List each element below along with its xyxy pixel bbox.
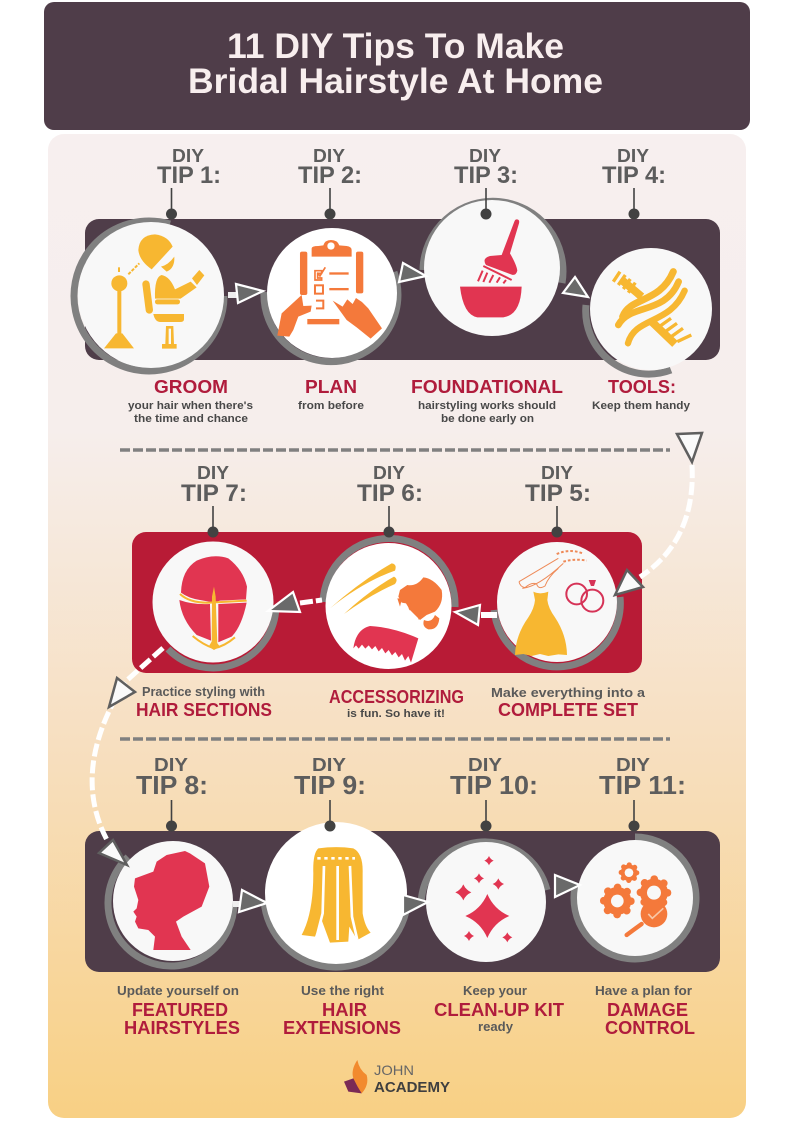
logo: John Academy <box>344 1060 450 1096</box>
circle: tip 10 clean-up kit <box>421 842 547 962</box>
caption: featured hairstyles: FEATURED <box>132 1000 228 1020</box>
band: row 3 <box>85 831 720 972</box>
caption: foundational <box>411 377 563 425</box>
tip 3 label: TIP 3: <box>454 162 518 189</box>
tip 5 label <box>525 463 591 538</box>
arrow: tip 2 to 3 <box>399 263 426 282</box>
tip 4 label <box>602 146 666 220</box>
icon: salon hair dryer chair <box>104 234 204 349</box>
caption: complete set: Make everything into a <box>491 685 646 700</box>
caption: clean-up kit: Keep your <box>463 983 527 998</box>
caption: hair extensions: HAIR <box>322 1000 367 1020</box>
tip 6 label <box>357 463 423 538</box>
caption: groom <box>128 377 253 425</box>
caption: damage control: Have a plan for <box>595 983 692 998</box>
tip 3 label: DIY <box>469 146 501 166</box>
caption: complete set: COMPLETE SET <box>498 700 638 720</box>
tip 8 label: TIP 8: <box>136 770 208 800</box>
caption: hair sections: HAIR SECTIONS <box>136 700 272 720</box>
arrow: tip 10 to 11 <box>555 875 580 897</box>
tip 9 label <box>294 755 366 832</box>
caption: featured hairstyles: Update yourself on <box>117 983 239 998</box>
tip 2 label: TIP 2: <box>298 162 362 189</box>
icon: flowers and mirror <box>603 864 668 935</box>
tip 11 label: TIP 11: <box>599 770 686 800</box>
tip 11 label <box>599 755 686 832</box>
arrow: tip 5 to 6 <box>455 605 497 625</box>
caption: tools: Keep them handy <box>592 400 691 412</box>
tip 8 label: DIY <box>154 755 188 775</box>
caption: groom: the time and chance <box>134 413 248 425</box>
circle: tip 6 accessorizing <box>323 538 455 669</box>
tip 1 label: TIP 1: <box>157 162 221 189</box>
tip 8 label <box>136 755 208 832</box>
tip 2 label: DIY <box>313 146 345 166</box>
divider: dashed line 1 <box>120 448 670 452</box>
circle: tip 3 foundational <box>423 200 563 336</box>
panel: gradient background <box>48 134 746 1118</box>
caption: featured hairstyles: HAIRSTYLES <box>124 1018 240 1038</box>
icon: woman silhouette <box>133 851 209 950</box>
icon: sparkles <box>455 856 512 942</box>
title banner <box>44 2 750 130</box>
tip 7 label: TIP 7: <box>181 480 247 507</box>
tip 2 label <box>298 146 362 220</box>
arrow: tip 8 to 9 <box>233 890 267 912</box>
tip 6 label: DIY <box>373 463 405 483</box>
caption: accessorizing <box>329 687 464 720</box>
caption: complete set <box>491 685 646 720</box>
caption: tools: TOOLS: <box>608 377 676 397</box>
connector: dashed curve row 1 to row 2 <box>615 433 702 595</box>
caption: clean-up kit <box>434 983 564 1034</box>
caption: damage control: CONTROL <box>605 1018 695 1038</box>
arrow: tip 9 to 10 <box>403 895 428 915</box>
logo: John Academy: ACADEMY <box>374 1080 450 1096</box>
title banner: 11 DIY Tips To Make <box>227 27 564 66</box>
caption: hair extensions: EXTENSIONS <box>283 1018 401 1038</box>
divider: dashed line 2 <box>120 737 670 741</box>
connector: dashed curve row 2 to row 3 <box>92 648 163 865</box>
tip 7 label: DIY <box>197 463 229 483</box>
tip 7 label <box>181 463 247 538</box>
icon: dye brush and bowl <box>460 219 522 317</box>
tip 6 label: TIP 6: <box>357 480 423 507</box>
arrow: tip 1 to 2 <box>228 284 263 303</box>
tip 10 label: DIY <box>468 755 502 775</box>
icon: clipboard with hands <box>277 240 382 339</box>
tip 4 label: DIY <box>617 146 649 166</box>
icon: hair extension weft <box>302 847 371 943</box>
icon: pins, claw clip, comb <box>330 563 442 663</box>
arrow: tip 6 to 7 <box>268 592 322 612</box>
caption: hair sections: Practice styling with <box>142 684 265 699</box>
caption: tools <box>592 377 691 412</box>
circle: tip 2 plan <box>264 228 398 362</box>
circle: tip 8 featured hairstyles <box>108 841 234 966</box>
caption: clean-up kit: ready <box>478 1019 514 1034</box>
logo: John Academy: JOHN <box>374 1062 414 1078</box>
tip 11 label: DIY <box>616 755 650 775</box>
caption: clean-up kit: CLEAN-UP KIT <box>434 1000 564 1020</box>
title banner: Bridal Hairstyle At Home <box>188 62 603 101</box>
icon: dress, veil, rings <box>515 551 603 656</box>
tip 3 label <box>454 146 518 220</box>
circle: tip 7 hair sections <box>152 542 276 668</box>
caption: foundational: hairstyling works should <box>418 400 556 412</box>
tip 5 label: DIY <box>541 463 573 483</box>
caption: accessorizing: ACCESSORIZING <box>329 687 464 707</box>
circle: tip 11 damage control <box>574 837 696 959</box>
circle: tip 1 groom <box>74 221 224 371</box>
tip 5 label: TIP 5: <box>525 480 591 507</box>
caption: groom: GROOM <box>154 377 228 397</box>
caption: groom: your hair when there's <box>128 400 253 412</box>
circle: tip 4 tools <box>586 248 712 374</box>
caption: hair extensions <box>283 983 401 1038</box>
tip 9 label: DIY <box>312 755 346 775</box>
caption: hair sections <box>136 684 272 720</box>
caption: accessorizing: is fun. So have it! <box>347 708 445 720</box>
circle: tip 5 complete set <box>494 542 620 667</box>
arrow: tip 3 to 4 <box>563 277 588 297</box>
caption: foundational: FOUNDATIONAL <box>411 377 563 397</box>
band: row 2 <box>132 532 642 673</box>
caption: plan: PLAN <box>305 377 357 397</box>
tip 10 label <box>450 755 538 832</box>
caption: damage control: DAMAGE <box>607 1000 688 1020</box>
caption: damage control <box>595 983 695 1038</box>
tip 10 label: TIP 10: <box>450 770 538 800</box>
caption: hair extensions: Use the right <box>301 983 385 998</box>
caption: plan: from before <box>298 400 364 412</box>
tip 9 label: TIP 9: <box>294 770 366 800</box>
tip 4 label: TIP 4: <box>602 162 666 189</box>
caption: foundational: be done early on <box>441 413 534 425</box>
tip 1 label: DIY <box>172 146 204 166</box>
caption: featured hairstyles <box>117 983 240 1038</box>
caption: plan <box>298 377 364 412</box>
band: row 1 <box>85 219 720 360</box>
tip 1 label <box>157 146 221 220</box>
circle: tip 9 hair extensions <box>264 822 407 967</box>
icon: hair section diagram <box>179 556 247 650</box>
icon: combs and hair <box>613 272 691 344</box>
